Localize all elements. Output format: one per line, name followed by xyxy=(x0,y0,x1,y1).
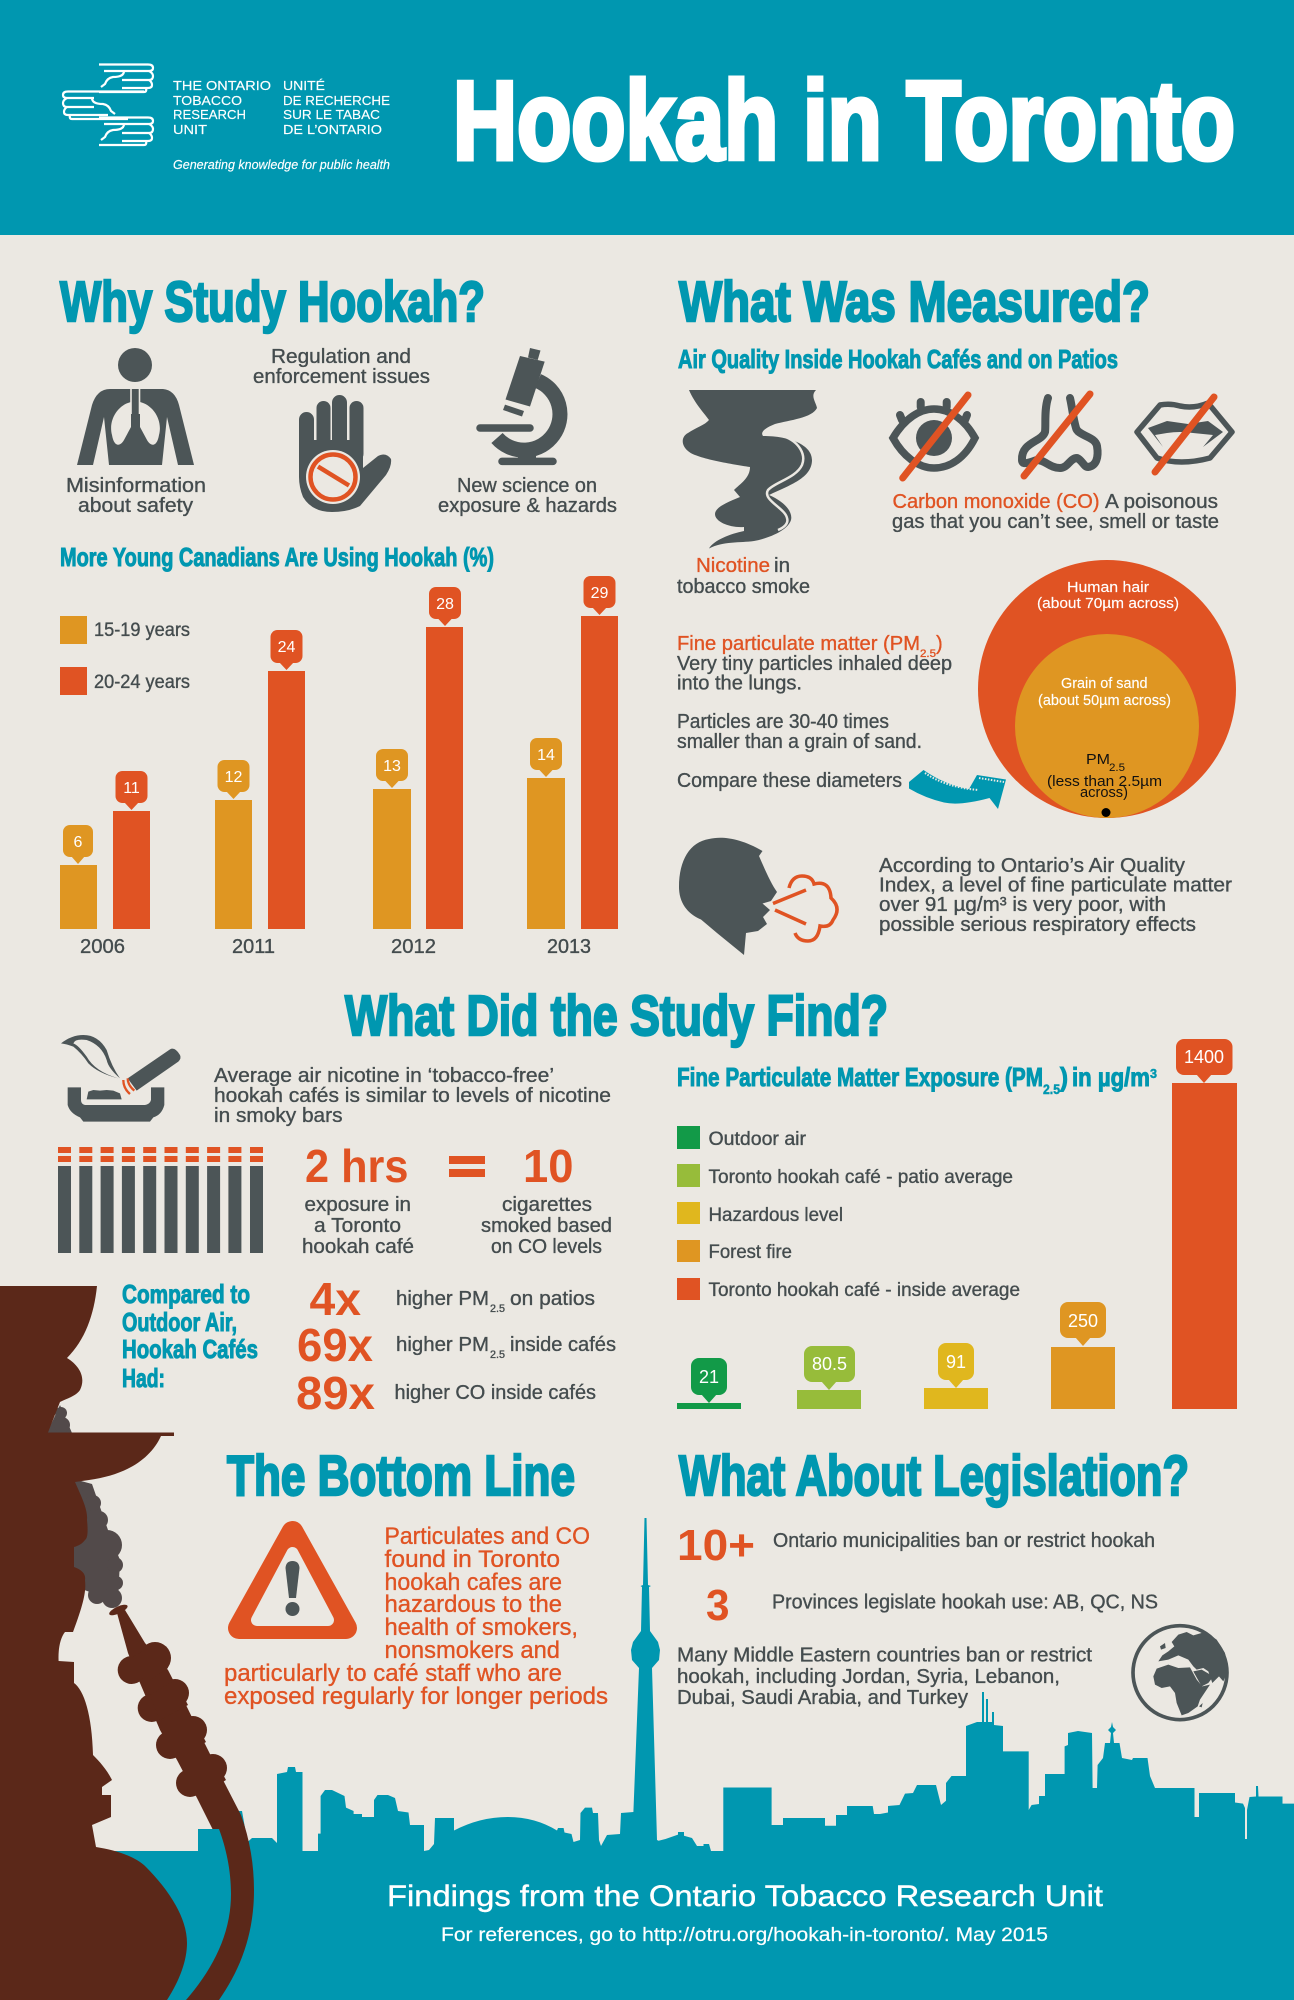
stats: multipliers: 2.5 xyxy=(490,1303,505,1315)
heading: What Did the Study Find? xyxy=(345,984,888,1048)
logo text: RESEARCH xyxy=(173,107,246,122)
text: carbon monoxide xyxy=(892,491,1219,533)
panel: young Canadians bar chart xyxy=(60,542,618,958)
text: bottom line message: hookah cafes are xyxy=(384,1569,562,1596)
text: fine particulate matter xyxy=(677,633,952,694)
logo text: UNIT xyxy=(173,122,207,137)
icon: hand with prohibition sign xyxy=(299,395,391,512)
diagram: diameter circles: 2.5 xyxy=(1109,762,1125,774)
chart heading: ) xyxy=(1060,1062,1068,1092)
panel: what about legislation xyxy=(677,1444,1228,1720)
stat: 3 xyxy=(706,1581,1158,1630)
text: new science xyxy=(438,475,617,517)
text: fine particulate matter: ) xyxy=(936,633,943,655)
bar: hazardous 91: 91 xyxy=(946,1352,966,1372)
text: compared to outdoor air xyxy=(122,1279,258,1393)
text: fine particulate matter: Fine particulate matter (PM xyxy=(677,633,920,655)
chart heading: More Young Canadians Are Using Hookah (%) xyxy=(60,542,494,572)
legend: 20-24 years xyxy=(94,672,190,693)
text: compare: Compare these diameters xyxy=(677,770,902,792)
stat: 10+ xyxy=(677,1521,1155,1570)
bars 2011: 24 xyxy=(278,639,296,656)
bars 2012: 13 xyxy=(383,758,401,775)
skyline of Toronto xyxy=(100,1518,1294,2000)
logo text: THE ONTARIO xyxy=(173,78,271,93)
stats: multipliers: 89x xyxy=(296,1367,375,1419)
text: nicotine xyxy=(677,555,810,598)
bar: patio 80.5: 80.5 xyxy=(812,1354,847,1374)
text: Middle Eastern countries: Dubai, Saudi Arabia, and Turkey xyxy=(677,1687,968,1709)
text: new science: exposure & hazards xyxy=(438,495,617,517)
bars 2011: 12 xyxy=(225,769,242,786)
footer text xyxy=(387,1880,1104,1946)
icon: microscope xyxy=(480,348,560,461)
text: fine particulate matter: 2.5 xyxy=(920,648,936,660)
text: bottom line message: health of smokers, xyxy=(384,1614,578,1641)
text: particle size: smaller than a grain of sand. xyxy=(677,731,922,753)
text: bottom line message xyxy=(224,1523,608,1710)
icon: lungs xyxy=(77,348,194,465)
bar: outdoor air 21 xyxy=(677,1358,741,1409)
text: nicotine: in xyxy=(774,555,790,577)
bars 2011 xyxy=(215,630,305,929)
logo: OTRU hands xyxy=(63,64,153,145)
stats: multipliers: on patios xyxy=(510,1288,595,1310)
text: regulation: Regulation and xyxy=(271,346,411,368)
logo text: UNITÉ xyxy=(283,78,325,93)
text: compared to outdoor air: Outdoor Air, xyxy=(122,1307,237,1337)
chart heading: Fine Particulate Matter Exposure (PM xyxy=(677,1062,1043,1092)
diagram: diameter circles: across) xyxy=(1080,784,1128,801)
stats: multipliers: 69x xyxy=(297,1319,373,1371)
text: Middle Eastern countries xyxy=(677,1644,1092,1709)
icon: globe xyxy=(1133,1626,1228,1720)
text: misinformation xyxy=(66,475,206,517)
diagram: diameter circles: (about 70µm across) xyxy=(1037,595,1179,612)
bar: forest fire 250: 250 xyxy=(1068,1311,1098,1331)
year labels xyxy=(80,936,591,958)
stat: 10+: Ontario municipalities ban or restrict hookah xyxy=(773,1530,1155,1552)
chart heading: 3 xyxy=(1150,1066,1157,1081)
chart heading: in µg/m xyxy=(1072,1062,1150,1092)
text: bottom line message: particularly to café staff who are xyxy=(224,1660,562,1687)
icon: warning triangle xyxy=(239,1532,346,1628)
text: air nicotine: Average air nicotine in ‘tobacco-free’ xyxy=(214,1065,554,1087)
text: nicotine: Nicotine xyxy=(696,555,770,577)
legend: Forest fire xyxy=(708,1242,792,1263)
text: particle size: Particles are 30-40 times xyxy=(677,711,889,733)
legend: Toronto hookah café - patio average xyxy=(708,1167,1013,1188)
diagram: diameter circles: (about 50µm across) xyxy=(1038,692,1171,709)
bars 2006 xyxy=(60,771,150,929)
bars 2012: 28 xyxy=(436,596,454,613)
stats: multipliers: higher PM xyxy=(396,1288,489,1310)
arrow: ruler xyxy=(909,770,1006,809)
stat: 2 hrs = 10 xyxy=(302,1140,612,1258)
panel: why study hookah xyxy=(60,270,617,517)
icon: ashtray xyxy=(61,1035,181,1122)
diagram: diameter circles: Human hair xyxy=(1067,579,1149,596)
text: compared to outdoor air: Had: xyxy=(122,1363,165,1393)
year labels: 2006 xyxy=(80,936,125,958)
text: bottom line message: hazardous to the xyxy=(384,1591,562,1618)
heading: The Bottom Line xyxy=(227,1444,575,1508)
diagram: diameter circles: Grain of sand xyxy=(1061,675,1148,692)
stats: multipliers: higher CO inside cafés xyxy=(394,1382,596,1404)
logo text: SUR LE TABAC xyxy=(283,107,380,122)
logo text xyxy=(173,78,390,172)
bar: inside 1400 xyxy=(1172,1039,1237,1409)
text: air quality index xyxy=(879,855,1232,936)
text: air quality index: over 91 µg/m³ is very poor, with xyxy=(879,894,1166,916)
logo text: TOBACCO xyxy=(173,93,242,108)
text: compared to outdoor air: Compared to xyxy=(122,1279,250,1309)
text: bottom line message: nonsmokers and xyxy=(384,1637,560,1664)
panel: what did the study find xyxy=(58,984,1237,1419)
text: nicotine: tobacco smoke xyxy=(677,576,810,598)
stat: 2 hrs = 10: on CO levels xyxy=(491,1236,602,1258)
legend: Toronto hookah café - inside average xyxy=(708,1280,1020,1301)
text: compared to outdoor air: Hookah Cafés xyxy=(122,1334,258,1364)
text: carbon monoxide: gas that you can’t see, smell or taste xyxy=(892,511,1219,533)
legend: 15-19 years xyxy=(94,620,190,641)
stats: multipliers: inside cafés xyxy=(510,1334,616,1356)
text: Middle Eastern countries: hookah, including Jordan, Syria, Lebanon, xyxy=(677,1666,1060,1688)
icon: tobacco smoke xyxy=(683,390,817,548)
hookah hose xyxy=(108,1603,254,2000)
text: bottom line message: Particulates and CO xyxy=(384,1523,590,1550)
chart: PM2.5 exposure xyxy=(677,1039,1237,1409)
header band xyxy=(0,0,1294,235)
hookah smoke xyxy=(47,1405,123,1608)
year labels: 2012 xyxy=(391,936,436,958)
bars 2013 xyxy=(527,576,618,929)
text: particle size xyxy=(677,711,922,753)
icon: head exhaling xyxy=(679,838,837,955)
hookah smoker silhouette xyxy=(0,1286,187,2000)
text: bottom line message: found in Toronto xyxy=(384,1546,560,1573)
icon: crossed-out eye xyxy=(893,395,975,478)
panel: the bottom line xyxy=(224,1444,608,1710)
stat: 2 hrs = 10: a Toronto xyxy=(314,1215,401,1237)
diagram: diameter circles: PM xyxy=(1086,751,1110,768)
stat: 2 hrs = 10: 2 hrs xyxy=(305,1140,408,1192)
text: carbon monoxide: A poisonous xyxy=(1105,491,1218,513)
text: Middle Eastern countries: Many Middle Eastern countries ban or restrict xyxy=(677,1644,1092,1666)
text: regulation: enforcement issues xyxy=(253,366,430,388)
chart heading: 2.5 xyxy=(1043,1081,1060,1097)
diagram: diameter circles xyxy=(978,560,1236,818)
text: air nicotine: hookah cafés is similar to levels of nicotine xyxy=(214,1085,611,1107)
legend xyxy=(677,1126,1020,1301)
text: misinformation: about safety xyxy=(78,495,193,517)
text: misinformation: Misinformation xyxy=(66,475,206,497)
text: air nicotine xyxy=(214,1065,611,1127)
text: air nicotine: in smoky bars xyxy=(214,1105,342,1127)
bar: inside 1400: 1400 xyxy=(1184,1047,1224,1067)
stat: 2 hrs = 10: cigarettes xyxy=(502,1194,592,1216)
logo text: Generating knowledge for public health xyxy=(173,157,390,172)
stat: 2 hrs = 10: smoked based xyxy=(481,1215,612,1237)
legend xyxy=(60,616,190,695)
bar: outdoor air 21: 21 xyxy=(699,1367,719,1387)
bar: patio 80.5 xyxy=(797,1346,861,1409)
stat: 2 hrs = 10: 10 xyxy=(523,1140,574,1192)
text: new science: New science on xyxy=(457,475,597,497)
bars 2006: 11 xyxy=(123,780,140,797)
bars 2013: 14 xyxy=(537,747,555,764)
text: fine particulate matter: Very tiny particles inhaled deep xyxy=(677,653,952,675)
footer text: For references, go to http://otru.org/hookah-in-toronto/. May 2015 xyxy=(441,1925,1048,1946)
legend: Outdoor air xyxy=(708,1129,807,1150)
text: air quality index: According to Ontario’s Air Quality xyxy=(879,855,1185,877)
icon: crossed-out nose xyxy=(1022,394,1098,476)
bars 2013: 29 xyxy=(591,585,608,602)
stats: multipliers: 2.5 xyxy=(490,1349,505,1361)
stat: 2 hrs = 10: hookah café xyxy=(302,1236,414,1258)
text: carbon monoxide: Carbon monoxide (CO) xyxy=(892,491,1100,513)
legend: Hazardous level xyxy=(708,1205,843,1226)
logo text: DE RECHERCHE xyxy=(283,93,390,108)
text: regulation xyxy=(253,346,430,388)
text: bottom line message: exposed regularly for longer periods xyxy=(224,1683,608,1710)
stat: 2 hrs = 10: exposure in xyxy=(304,1194,411,1216)
stat: 10+: 10+ xyxy=(677,1521,755,1570)
bars 2006: 6 xyxy=(74,834,83,851)
stats: multipliers: higher PM xyxy=(396,1334,489,1356)
text: air quality index: Index, a level of fine particulate matter xyxy=(879,874,1232,896)
stats: multipliers: 4x xyxy=(310,1273,361,1325)
diagram: diameter circles: (less than 2.5µm xyxy=(1047,773,1162,790)
year labels: 2011 xyxy=(232,936,275,958)
icon: ten cigarettes xyxy=(58,1147,263,1253)
stat: 3: Provinces legislate hookah use: AB, QC, NS xyxy=(772,1592,1158,1614)
heading: What Was Measured? xyxy=(679,270,1150,334)
text: air quality index: possible serious respiratory effects xyxy=(879,914,1196,936)
bar: hazardous 91 xyxy=(924,1343,988,1409)
stats: multipliers xyxy=(296,1273,616,1419)
footer text: Findings from the Ontario Tobacco Research Unit xyxy=(387,1880,1104,1913)
panel: what was measured xyxy=(677,270,1236,955)
year labels: 2013 xyxy=(547,936,591,958)
logo text: DE L’ONTARIO xyxy=(283,122,382,137)
subheading: Air Quality Inside Hookah Cafés and on Patios xyxy=(678,344,1118,374)
bars 2012 xyxy=(373,587,463,929)
icon: crossed-out lips xyxy=(1137,397,1232,472)
text: fine particulate matter: into the lungs. xyxy=(677,672,802,694)
stat: 3: 3 xyxy=(706,1581,730,1630)
heading: Why Study Hookah? xyxy=(60,270,485,334)
bar: forest fire 250 xyxy=(1051,1302,1115,1409)
